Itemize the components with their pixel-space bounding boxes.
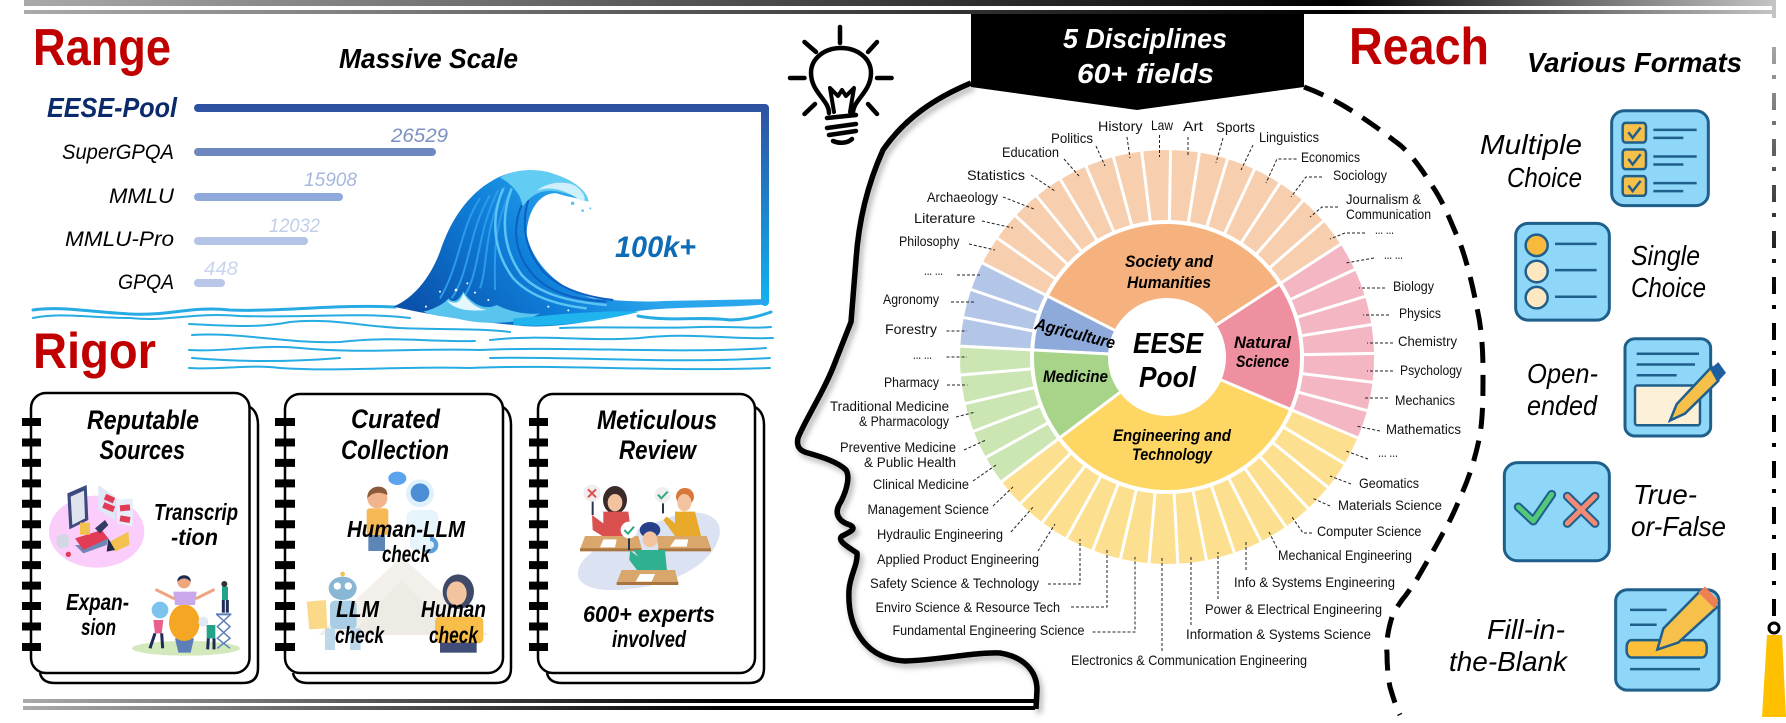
text: 600+ experts involved: involved [612,626,687,652]
bar chart: dataset sizes [47,92,765,302]
bar: EESE-Pool [47,92,765,302]
text: Human-LLM check: check [382,541,431,567]
bar: SuperGPQA: 26529 [390,126,448,147]
discipline label: Engineering and Technology [1113,426,1232,464]
icon: blank line with pencil [1616,586,1719,690]
bar: GPQA: GPQA [118,271,174,294]
icon: transcription books illustration [49,485,144,568]
heading: Various Formats: Various Formats [1527,47,1742,78]
water lines [33,306,773,369]
field labels: Medicine: ... ... [913,346,932,362]
field labels: Engineering and Technology: Power & Electrical Engineering [1205,601,1382,617]
field labels: Society and Humanities: History [1098,118,1142,134]
discipline label: Medicine: Medicine [1043,367,1108,386]
discipline label: Society and Humanities: Humanities [1127,273,1211,292]
field labels: Society and Humanities: Archaeology [927,189,998,205]
format: True-or-False [1504,463,1726,561]
field labels: Medicine: Pharmacy [884,374,939,390]
discipline label: Agriculture: Agriculture [1032,314,1117,353]
heading: Reputable Sources: Sources [100,435,185,465]
field labels: Natural Science: Psychology [1400,362,1462,378]
icon: checklist [1612,111,1708,206]
field labels: Society and Humanities: Art [1183,118,1203,134]
field labels: Engineering and Technology: Geomatics [1359,475,1419,491]
text: Transcrip-tion [154,499,238,550]
heading: Reach: Reach [1349,18,1489,76]
callout: 100k+: 100k+ [615,231,696,264]
icon: expansion bulb illustration [132,575,240,656]
field labels: Society and Humanities: Sports [1216,119,1255,135]
text: LLM check [335,596,385,648]
ring: field wedges [926,116,1408,598]
wedge separators [957,147,1377,567]
field labels: Natural Science: Biology [1393,278,1434,294]
heading: Reputable Sources [87,405,199,465]
field labels: Society and Humanities: Statistics [967,167,1025,183]
heading: Curated Collection [341,404,449,465]
text: LLM check: check [335,622,385,648]
text: Human-LLM check [347,516,466,567]
field labels: Society and Humanities: Philosophy [899,233,960,249]
field labels: Agriculture [883,262,982,337]
format: Open-ended: Open- [1527,358,1598,389]
sunburst chart: disciplines and fields [830,116,1462,668]
bar: SuperGPQA [62,126,448,164]
text: Expan-sion: sion [81,614,116,640]
field labels: Society and Humanities: Politics [1051,130,1093,146]
field labels: Society and Humanities: Journalism & [1346,191,1422,207]
field labels: Agriculture: Agronomy [883,291,939,307]
bar: SuperGPQA: SuperGPQA [62,141,174,164]
text: Transcrip-tion: -tion [171,524,218,550]
format: Open-ended: ended [1527,390,1598,421]
format: Single Choice [1516,223,1706,320]
heading: Meticulous Review: Meticulous [597,405,717,435]
field labels: Engineering and Technology: ... ... [1378,444,1398,460]
field labels: Natural Science: Physics [1399,305,1441,321]
field labels: Engineering and Technology [868,444,1442,668]
center label: EESE Pool: EESE [1133,328,1204,360]
format: Multiple Choice: Choice [1507,162,1582,193]
right edge dashed cord [1769,0,1779,633]
heading: Meticulous Review: Review [619,435,698,465]
text: LLM check: LLM [336,596,380,622]
field labels: Agriculture: Forestry [885,321,937,337]
field labels: Society and Humanities: Linguistics [1259,129,1319,145]
icon: pad with pencil [1625,339,1726,436]
text: Transcrip-tion: Transcrip [154,499,238,525]
icon: radio list [1516,223,1609,320]
discipline label: Natural Science: Natural [1234,333,1292,352]
wave illustration [393,170,767,326]
format: Single Choice: Single [1631,240,1700,271]
format: Open-ended [1527,339,1726,436]
field labels: Engineering and Technology: Materials Science [1338,497,1442,513]
field labels: Society and Humanities: Law [1151,117,1174,133]
field labels: Engineering and Technology: Management Science [868,501,989,517]
bar: MMLU [109,170,357,208]
illustration: human and LLM check triangle [307,472,488,653]
field labels: Engineering and Technology: Fundamental Engineering Science [892,622,1085,638]
banner: 5 Disciplines 60+ fields [971,14,1304,110]
field labels: Engineering and Technology: Enviro Science & Resource Tech [876,599,1060,615]
format: True-or-False: True- [1633,479,1697,510]
text: 600+ experts involved: 600+ experts [583,601,715,627]
field labels: Society and Humanities: Education [1002,144,1059,160]
field labels: Society and Humanities: Economics [1301,149,1360,165]
field labels: Engineering and Technology: Computer Science [1317,523,1422,539]
bar: EESE-Pool: EESE-Pool [47,92,178,123]
discipline label: Society and Humanities: Society and [1125,252,1214,271]
ring: discipline sectors [1033,223,1301,491]
bar: MMLU: 15908 [304,170,357,191]
heading: Curated Collection: Collection [341,435,449,465]
heading: Rigor: Rigor [33,323,156,379]
heading: Range: Range [33,19,171,77]
text: Human check: Human [421,596,486,622]
field labels: Agriculture: ... ... [924,262,943,278]
text: Expan-sion: Expan- [66,589,129,615]
bottom rule bars [23,699,1035,710]
field labels: Medicine [830,346,996,492]
top rule bars [24,0,1776,14]
tassel [1762,635,1786,717]
center label: EESE Pool [1133,328,1204,394]
format: Fill-in-the-Blank: the-Blank [1449,646,1569,677]
icon: check and cross [1504,463,1609,561]
field labels: Engineering and Technology: Mechanical Engineering [1278,547,1412,563]
field labels: Natural Science: Chemistry [1398,333,1457,349]
heading: Reputable Sources: Reputable [87,405,199,435]
format: Single Choice: Choice [1631,272,1706,303]
discipline label: Natural Science: Science [1236,352,1289,371]
banner: 5 Disciplines 60+ fields: 60+ fields [1077,58,1214,89]
bar: GPQA: 448 [204,259,238,280]
field labels: Society and Humanities: Sociology [1333,167,1387,183]
field labels: Society and Humanities: Communication [1346,206,1431,222]
bar: MMLU-Pro: 12032 [269,216,320,237]
heading: Curated Collection: Curated [351,404,440,434]
field labels: Engineering and Technology: Info & Systems Engineering [1234,574,1395,590]
text: Human-LLM check: Human-LLM [347,516,466,542]
field labels: Medicine: & Pharmacology [859,413,949,429]
heading: Massive Scale: Massive Scale [339,43,518,74]
field labels: Engineering and Technology: Electronics & Communication Engineering [1071,652,1307,668]
field labels: Medicine: Traditional Medicine [830,398,949,414]
banner: 5 Disciplines 60+ fields: 5 Disciplines [1063,23,1227,54]
field labels: Medicine: Preventive Medicine [840,439,956,455]
bar: MMLU-Pro: MMLU-Pro [65,228,174,251]
format: Multiple Choice [1480,111,1708,206]
text: Human check: check [429,622,479,648]
field labels: Engineering and Technology: Information & Systems Science [1186,626,1371,642]
illustration: experts reviewing at desks [578,485,720,590]
center label: EESE Pool: Pool [1139,362,1197,394]
head back dashed outline [1304,87,1483,715]
icon: light bulb [790,27,892,143]
text: Human check [421,596,486,648]
field labels: Natural Science [1346,246,1462,437]
text: Expan-sion [66,589,129,640]
field labels: Society and Humanities: Literature [914,210,976,226]
panel: Curated Collection [285,394,511,683]
bar: MMLU: MMLU [109,185,175,208]
format: True-or-False: or-False [1631,511,1726,542]
field labels: Medicine: & Public Health [864,454,956,470]
discipline label: Natural Science [1234,333,1292,371]
discipline label: Engineering and Technology: Engineering and [1113,426,1232,445]
field labels: Engineering and Technology: Safety Science & Technology [870,575,1039,591]
field labels: Medicine: Clinical Medicine [873,476,969,492]
text: 600+ experts involved [583,601,715,652]
bar: GPQA [118,259,238,294]
field labels: Natural Science: Mechanics [1395,392,1455,408]
field labels: Society and Humanities [899,117,1431,250]
field labels: Engineering and Technology: Hydraulic Engineering [877,526,1003,542]
format: Fill-in-the-Blank: Fill-in- [1487,614,1565,645]
panel: Reputable Sources [31,393,258,683]
format: Multiple Choice: Multiple [1480,129,1582,160]
format: Fill-in-the-Blank [1449,586,1719,690]
field labels: Engineering and Technology: Applied Product Engineering [877,551,1039,567]
bar: MMLU-Pro [65,216,320,251]
discipline label: Engineering and Technology: Technology [1132,445,1213,464]
field labels: Natural Science: ... ... [1384,246,1403,262]
field labels: Natural Science: Mathematics [1386,421,1461,437]
heading: Meticulous Review [597,405,717,465]
discipline label: Society and Humanities [1125,252,1214,292]
panel: Meticulous Review [538,394,764,683]
head profile outline [797,83,1037,709]
field labels: Society and Humanities: ... ... [1375,221,1394,237]
